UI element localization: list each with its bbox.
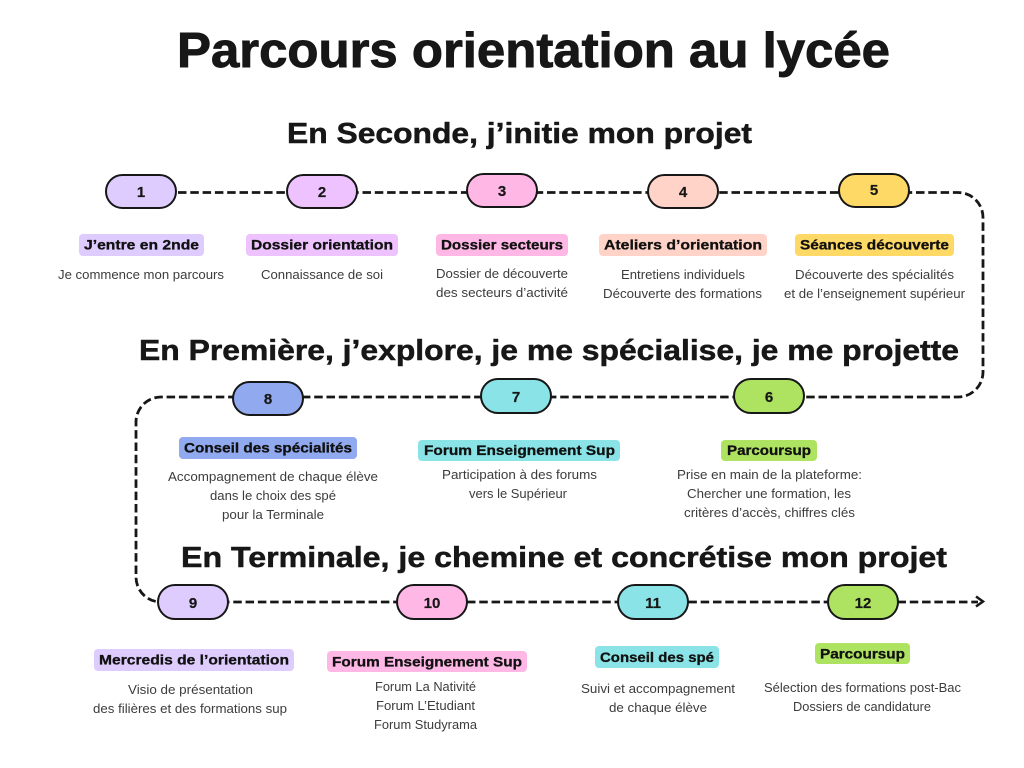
description 3: Dossier de découverte [436, 267, 568, 281]
description 7 [442, 468, 597, 501]
label 9: Mercredis de l’orientation [99, 652, 289, 668]
description 8 [168, 470, 378, 522]
description 6: critères d’accès, chiffres clés [684, 506, 855, 520]
label 11 [595, 646, 719, 668]
label 8 [179, 437, 357, 459]
pill 2 [287, 175, 357, 208]
pill 12 [828, 585, 898, 619]
pill 7 [481, 379, 551, 413]
description 5: et de l’enseignement supérieur [784, 287, 965, 301]
label 10 [327, 651, 527, 672]
pill 1: 1 [137, 184, 145, 201]
pill 3: 3 [498, 183, 506, 200]
heading: En Première: En Première, j’explore, je me spécialise, je me projette [139, 335, 959, 367]
label 4: Ateliers d’orientation [604, 238, 762, 252]
pill 6 [734, 379, 804, 413]
description 8: Accompagnement de chaque élève [168, 470, 378, 484]
label 5: Séances découverte [800, 238, 950, 252]
step 7: Forum Enseignement Sup [418, 379, 620, 501]
description 2: Connaissance de soi [261, 268, 383, 282]
title: Parcours orientation au lycée [177, 24, 890, 78]
description 4: Découverte des formations [603, 287, 762, 301]
label 5 [795, 234, 954, 256]
arrow: dashed path connecting the steps [136, 192, 983, 606]
pill 4: 4 [679, 184, 688, 201]
description 12 [764, 681, 961, 714]
description 3: des secteurs d’activité [436, 286, 568, 300]
description 4 [603, 268, 762, 301]
heading: En Terminale: En Terminale, je chemine et concrétise mon projet [181, 542, 947, 574]
description 11 [581, 682, 736, 715]
description 10: Forum La Nativité [375, 680, 476, 694]
step 1: J'entre en 2nde [58, 175, 224, 282]
description 10 [374, 680, 477, 732]
description 11: de chaque élève [609, 701, 707, 715]
label 12: Parcoursup [820, 646, 905, 662]
description 9: Visio de présentation [128, 683, 253, 697]
step 2: Dossier orientation [246, 175, 398, 282]
step 8: Conseil des spécialités [168, 382, 378, 522]
label 1 [79, 234, 204, 256]
description 11: Suivi et accompagnement [581, 682, 736, 696]
label 7: Forum Enseignement Sup [424, 443, 615, 458]
description 9 [93, 683, 287, 716]
step 12: Parcoursup [764, 585, 961, 714]
pill 5: 5 [870, 182, 878, 199]
description 4: Entretiens individuels [621, 268, 745, 282]
description 1: Je commence mon parcours [58, 268, 224, 282]
description 3 [436, 267, 568, 300]
step 10: Forum Enseignement Sup [327, 585, 527, 732]
label 9 [94, 649, 294, 671]
description 7: vers le Supérieur [469, 487, 567, 501]
label 10: Forum Enseignement Sup [332, 654, 522, 670]
label 1: J’entre en 2nde [84, 238, 200, 252]
label 3: Dossier secteurs [441, 238, 563, 252]
description 5 [784, 268, 965, 301]
pill 9 [158, 585, 228, 619]
step 9: Mercredis de l'orientation [93, 585, 294, 716]
pill 8: 8 [264, 391, 272, 408]
pill 2: 2 [318, 184, 326, 201]
pill 4 [648, 175, 718, 208]
pill 7: 7 [512, 389, 520, 406]
description 9: des filières et des formations sup [93, 702, 287, 716]
pill 9: 9 [189, 595, 197, 612]
label 6: Parcoursup [727, 443, 811, 458]
pill 1 [106, 175, 176, 208]
label 2: Dossier orientation [251, 238, 393, 252]
pill 8 [233, 382, 303, 415]
pill 11: 11 [645, 595, 661, 612]
pill 5 [839, 174, 909, 207]
description 8: pour la Terminale [222, 508, 324, 522]
description 10: Forum L’Etudiant [376, 699, 476, 713]
label 2 [246, 234, 398, 256]
heading: En Seconde: En Seconde, j’initie mon projet [287, 118, 752, 150]
pill 10: 10 [424, 595, 440, 612]
label 4 [599, 234, 767, 256]
step 5: Séances découverte [784, 174, 965, 301]
description 12: Dossiers de candidature [793, 700, 931, 714]
description 6 [677, 468, 862, 520]
step 6: Parcoursup [677, 379, 862, 520]
description 12: Sélection des formations post-Bac [764, 681, 961, 695]
label 8: Conseil des spécialités [184, 440, 352, 456]
pill 11 [618, 585, 688, 619]
description 6: Chercher une formation, les [687, 487, 851, 501]
description 8: dans le choix des spé [210, 489, 336, 503]
description 5: Découverte des spécialités [795, 268, 954, 282]
description 7: Participation à des forums [442, 468, 597, 482]
pill 10 [397, 585, 467, 619]
label 11: Conseil des spé [600, 650, 715, 665]
description 6: Prise en main de la plateforme: [677, 468, 862, 482]
step 3: Dossier secteurs [436, 174, 568, 300]
label 12 [815, 643, 910, 664]
step 4: Ateliers d'orientation [599, 175, 767, 301]
step 11: Conseil des spé [581, 585, 736, 715]
pill 12: 12 [855, 595, 871, 612]
description 10: Forum Studyrama [374, 718, 477, 732]
label 7 [418, 440, 620, 461]
pill 6: 6 [765, 389, 773, 406]
label 6 [721, 440, 817, 461]
